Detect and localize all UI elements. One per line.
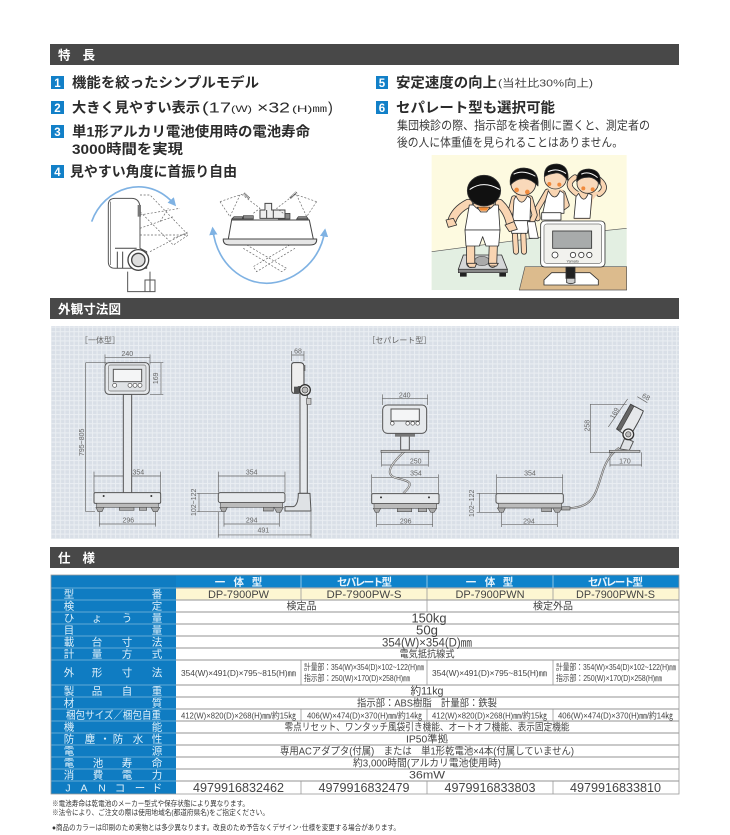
diagram: separate type front view: ［セパレート型］ <box>367 336 431 345</box>
table package sizes <box>181 710 673 722</box>
feature 3: 3000時間を実現 <box>72 141 183 157</box>
table row labels: 外形寸法 <box>64 666 163 679</box>
text block: separate type description: 集団検診の際、指示部を検者側に置くと、測定者の <box>397 118 650 132</box>
table package sizes: 406(W)×474(D)×370(H)㎜/約14㎏ <box>307 710 422 722</box>
table row labels: 検定 <box>64 600 163 612</box>
table merged values: 50g <box>416 624 438 638</box>
section header: 仕様 <box>50 547 679 568</box>
separate monitor <box>541 221 605 285</box>
table JAN codes: 4979916833803 <box>444 781 536 795</box>
table model numbers: DP-7900PW <box>208 589 270 601</box>
text: feature 6: セパレート型も選択可能 <box>396 100 555 116</box>
table JAN codes: 4979916832479 <box>318 781 410 795</box>
table JAN codes <box>193 781 661 795</box>
illustration: children at health check: Yamato <box>566 260 579 264</box>
table row labels: 電源 <box>64 744 163 758</box>
feature 2: ×32 <box>257 100 290 116</box>
table package sizes: 412(W)×820(D)×268(H)㎜/約15㎏ <box>432 710 547 722</box>
table column headers: セパレート型 <box>588 576 643 588</box>
feature 2: (H)㎜ <box>292 104 328 115</box>
footnotes: ※法令により、ご注文の際は使用地域名(都道府県名)をご指定ください。 <box>52 808 269 817</box>
table row labels: 目量 <box>64 624 163 636</box>
kid 3 <box>537 164 568 220</box>
section header: 外観寸法図: 外観寸法図 <box>58 298 121 318</box>
feature 2: 大きく見やすい表示 <box>72 100 200 116</box>
diagram: separate type front view: 250 <box>410 459 422 466</box>
section header: 特長 <box>50 44 679 65</box>
table JAN codes: 4979916832462 <box>193 781 284 795</box>
feature 2 <box>51 100 333 116</box>
table row labels <box>64 588 163 794</box>
diagram: integrated type side view: 68 <box>294 349 302 356</box>
diagram: separate type side view: 169 <box>609 407 621 420</box>
diagram: separate type front view: 296 <box>400 518 412 525</box>
table merged values: IP50準拠 <box>406 732 448 746</box>
feature 2: ) <box>328 100 333 116</box>
text: feature 6: 6 <box>379 103 385 115</box>
table outer dimensions: 計量部：354(W)×354(D)×102~122(H)㎜ <box>304 662 424 672</box>
table merged values: 専用ACアダプタ(付属) または 単1形乾電池×4本(付属していません) <box>280 744 574 758</box>
feature 3: 3 <box>54 127 61 139</box>
table row labels: 製品自重 <box>64 684 162 698</box>
table merged values: 検定品 <box>286 600 316 612</box>
diagram: separate type front view: 354 <box>410 471 422 478</box>
text: feature 5: 5 <box>379 78 386 90</box>
diagram: integrated type side view: 491 <box>257 527 269 534</box>
text block: separate type description <box>397 118 650 150</box>
table merged values: 検定外品 <box>533 600 573 612</box>
table model numbers: DP-7900PW-S <box>326 589 402 601</box>
table outer dimensions: 354(W)×491(D)×795~815(H)㎜ <box>432 668 547 678</box>
diagram: integrated type front view: 240 <box>121 351 133 358</box>
diagram: separate type side view: 354 <box>524 471 536 478</box>
footnotes <box>52 799 400 832</box>
diagram: integrated type front view: 296 <box>122 517 134 524</box>
footnotes: ●商品のカラーは印刷のため実物とは多少異なります。改良のため予告なくデザイン･仕様を変更する場合があります。 <box>52 823 400 832</box>
feature 2: (W) <box>231 104 252 115</box>
diagram: separate type side view: 102~122 <box>469 490 476 517</box>
table merged values: 約11kg <box>410 684 444 698</box>
table column headers: 一体型 <box>215 576 262 588</box>
kid 1 <box>446 175 517 267</box>
icon: top view swivelling head <box>213 192 325 283</box>
table row labels: 電池寿命 <box>64 756 163 770</box>
table outer dimensions <box>181 662 676 683</box>
diagram: integrated type front view: 169 <box>153 372 160 384</box>
text block: separate type description: 後の人に体重値を見られることはありません。 <box>397 134 623 150</box>
diagram: separate type side view: 258 <box>584 420 591 431</box>
table row labels: 梱包サイズ／梱包自重 <box>66 708 161 722</box>
feature 1: 機能を絞ったシンプルモデル <box>72 74 259 90</box>
diagram: integrated type side view: 294 <box>246 517 258 524</box>
feature 4: 見やすい角度に首振り自由 <box>70 164 237 180</box>
table: specifications <box>51 575 679 795</box>
table row labels: JANコード <box>65 782 162 794</box>
table background and grid <box>51 575 679 794</box>
table JAN codes: 4979916833810 <box>570 781 661 795</box>
table merged values: 指示部：ABS樹脂 計量部：鉄製 <box>357 696 497 710</box>
diagram: integrated type front view: ［一体型］ <box>80 335 120 345</box>
feature 3: 単1形アルカリ電池使用時の電池寿命 <box>72 124 310 140</box>
section header: 外観寸法図 <box>50 298 679 319</box>
feature 1: 1 <box>54 78 61 90</box>
section header: 仕様: 仕 様 <box>58 548 95 566</box>
table merged values: 電気抵抗線式 <box>400 648 454 660</box>
diagram: separate type side view: 170 <box>619 458 631 465</box>
diagram: integrated type front view: 354 <box>132 470 144 477</box>
diagram: separate type side view: 68 <box>641 393 651 403</box>
table outer dimensions: 指示部：250(W)×170(D)×258(H)㎜ <box>556 673 662 683</box>
text: feature 5: 安定速度の向上 <box>396 74 497 90</box>
table row labels: 消費電力 <box>64 768 162 782</box>
table package sizes: 412(W)×820(D)×268(H)㎜/約15㎏ <box>181 710 296 722</box>
panel: dimension drawings <box>51 326 679 539</box>
table column headers <box>215 576 643 588</box>
diagram: integrated type front view: 795~805 <box>79 429 86 456</box>
table outer dimensions: 指示部：250(W)×170(D)×258(H)㎜ <box>304 673 410 683</box>
table row labels: ひょう量 <box>64 612 163 624</box>
feature 2: (17 <box>202 100 231 116</box>
table row labels: 防塵・防水性 <box>64 732 162 746</box>
feature 3 <box>51 124 310 157</box>
table merged values: 約3,000時間(アルカリ電池使用時) <box>353 756 501 770</box>
diagram: integrated type side view <box>191 349 311 538</box>
table merged values: 36mW <box>409 770 446 782</box>
table outer dimensions: 計量部：354(W)×354(D)×102~122(H)㎜ <box>556 662 676 672</box>
table merged values: 150kg <box>412 612 447 626</box>
table model numbers: DP-7900PWN <box>456 589 525 601</box>
table model numbers <box>208 589 655 601</box>
table column headers: セパレート型 <box>337 576 392 588</box>
scale under kid <box>458 255 507 269</box>
diagram: integrated type side view: 102~122 <box>191 489 198 516</box>
illustration: children at health check <box>432 155 627 290</box>
table merged values: 零点リセット、ワンタッチ風袋引き機能、オートオフ機能、表示固定機能 <box>284 720 570 734</box>
feature 2: 2 <box>54 103 61 115</box>
section header: 特長: 特 長 <box>58 44 95 64</box>
table row labels: 材質 <box>64 696 162 710</box>
text: feature 5 <box>376 74 593 90</box>
icon: side view tilting head <box>92 187 188 292</box>
table row labels: 載台寸法 <box>64 636 163 648</box>
diagram: separate type side view: 294 <box>523 518 535 525</box>
table column headers: 一体型 <box>466 576 513 588</box>
text: feature 5: (当社比30%向上) <box>498 76 593 90</box>
footnotes: ※電池寿命は乾電池のメーカー型式や保存状態により異なります。 <box>52 799 249 808</box>
diagram: integrated type front view <box>79 335 163 527</box>
table row labels: 型番 <box>64 588 163 600</box>
diagram: integrated type side view: 354 <box>246 470 258 477</box>
table package sizes: 406(W)×474(D)×370(H)㎜/約14㎏ <box>558 710 673 722</box>
kid 2 <box>509 168 538 252</box>
diagram: separate type front view: 240 <box>399 392 411 399</box>
table model numbers: DP-7900PWN-S <box>576 589 655 601</box>
table merged values: 354(W)×354(D)㎜ <box>382 638 472 650</box>
table merged values <box>280 600 574 782</box>
diagram: separate type front view <box>367 336 439 527</box>
feature 4: 4 <box>54 167 61 179</box>
table row labels: 機能 <box>64 720 163 734</box>
table outer dimensions: 354(W)×491(D)×795~815(H)㎜ <box>181 668 296 678</box>
diagram: separate type side view <box>469 393 651 527</box>
table row labels: 計量方式 <box>64 648 163 660</box>
kid 4 <box>570 169 604 219</box>
